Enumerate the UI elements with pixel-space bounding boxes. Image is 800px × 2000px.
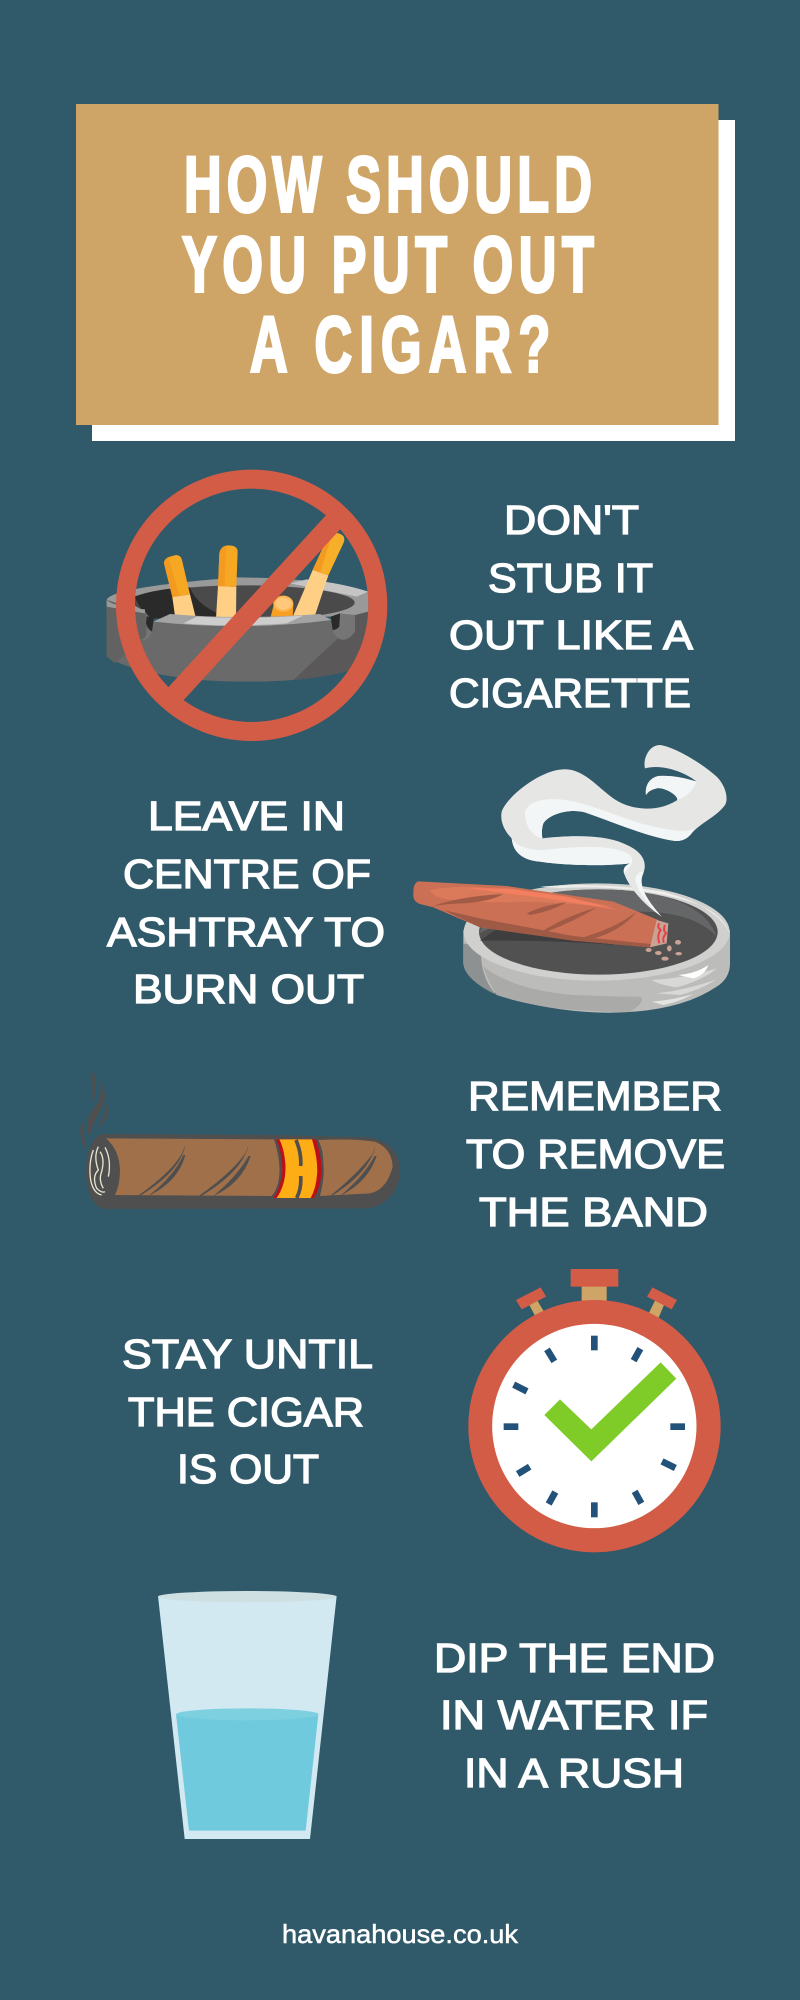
ashtray body (107, 600, 368, 682)
ashtray notches (140, 628, 152, 640)
stopwatch face (492, 1324, 696, 1528)
text: don't stub it out like a cigarette: OUT LIKE A (449, 612, 693, 658)
text: stay until the cigar is out: IS OUT (177, 1446, 319, 1492)
prohibition sign (125, 479, 378, 731)
cigar (413, 881, 668, 947)
icon: glass of water (158, 1591, 337, 1839)
text: stay until the cigar is out: STAY UNTIL (122, 1331, 373, 1377)
text: remember to remove the band: REMEMBER (468, 1073, 722, 1119)
title: HOW SHOULD (184, 141, 592, 229)
tray inner (479, 889, 718, 975)
cigarette right (292, 533, 344, 618)
cigarette left (164, 555, 196, 618)
text: remember to remove the band (466, 1073, 725, 1235)
band (273, 1139, 322, 1198)
text: dip the end in water if in a rush: IN WATER IF (440, 1692, 708, 1738)
check mark (544, 1362, 676, 1461)
cigar wrapper left (106, 1138, 280, 1196)
title panel (76, 104, 735, 441)
text: remember to remove the band: THE BAND (479, 1189, 708, 1235)
smoke wisps (80, 1072, 109, 1150)
smoke (501, 745, 727, 917)
stopwatch buttons (516, 1269, 677, 1318)
title: A CIGAR? (250, 301, 550, 389)
tray body (463, 930, 730, 1013)
text: don't stub it out like a cigarette (449, 497, 693, 716)
cigar wrapper right (318, 1139, 393, 1196)
footer url: havanahouse.co.uk (282, 1919, 519, 1949)
cigar shadow (480, 927, 617, 945)
cigarette short (270, 596, 293, 618)
ashtray front rim (153, 614, 332, 626)
text: leave in centre of ashtray to burn out: CENTRE OF (123, 851, 371, 897)
text: remember to remove the band: TO REMOVE (466, 1131, 725, 1177)
stopwatch case (468, 1300, 721, 1552)
text: don't stub it out like a cigarette: CIGARETTE (449, 670, 691, 716)
icon: cigar resting on ashtray with smoke (413, 745, 730, 1013)
glass rim (158, 1591, 337, 1602)
ashtray hole (133, 585, 355, 620)
icon: stopwatch with check mark (468, 1269, 721, 1552)
text: don't stub it out like a cigarette: DON'T (504, 497, 639, 543)
hour ticks (504, 1336, 685, 1517)
title (182, 141, 594, 389)
ashtray back rim (107, 577, 368, 617)
glass (158, 1596, 337, 1839)
text: stay until the cigar is out: THE CIGAR (128, 1389, 364, 1435)
cigarette middle (216, 545, 238, 618)
tray rim (464, 883, 730, 981)
text: leave in centre of ashtray to burn out: BURN OUT (133, 966, 364, 1012)
burning end (90, 1147, 109, 1195)
text: dip the end in water if in a rush (434, 1635, 715, 1796)
text: stay until the cigar is out (122, 1331, 373, 1492)
title: YOU PUT OUT (182, 221, 594, 309)
text: leave in centre of ashtray to burn out (107, 793, 385, 1012)
wrapper veins (127, 1145, 377, 1203)
water surface (176, 1708, 319, 1720)
text: leave in centre of ashtray to burn out: ASHTRAY TO (107, 909, 385, 955)
icon: cigar with band (80, 1072, 400, 1209)
text: dip the end in water if in a rush: DIP THE END (434, 1635, 715, 1681)
ash bits (646, 940, 682, 961)
tray highlights (652, 968, 717, 987)
water (176, 1714, 318, 1831)
icon: ashtray with cigarettes and prohibition sign (107, 479, 378, 731)
text: dip the end in water if in a rush: IN A RUSH (464, 1750, 684, 1796)
text: leave in centre of ashtray to burn out: LEAVE IN (148, 793, 345, 839)
text: don't stub it out like a cigarette: STUB IT (488, 555, 653, 601)
cigar outline (86, 1134, 400, 1209)
